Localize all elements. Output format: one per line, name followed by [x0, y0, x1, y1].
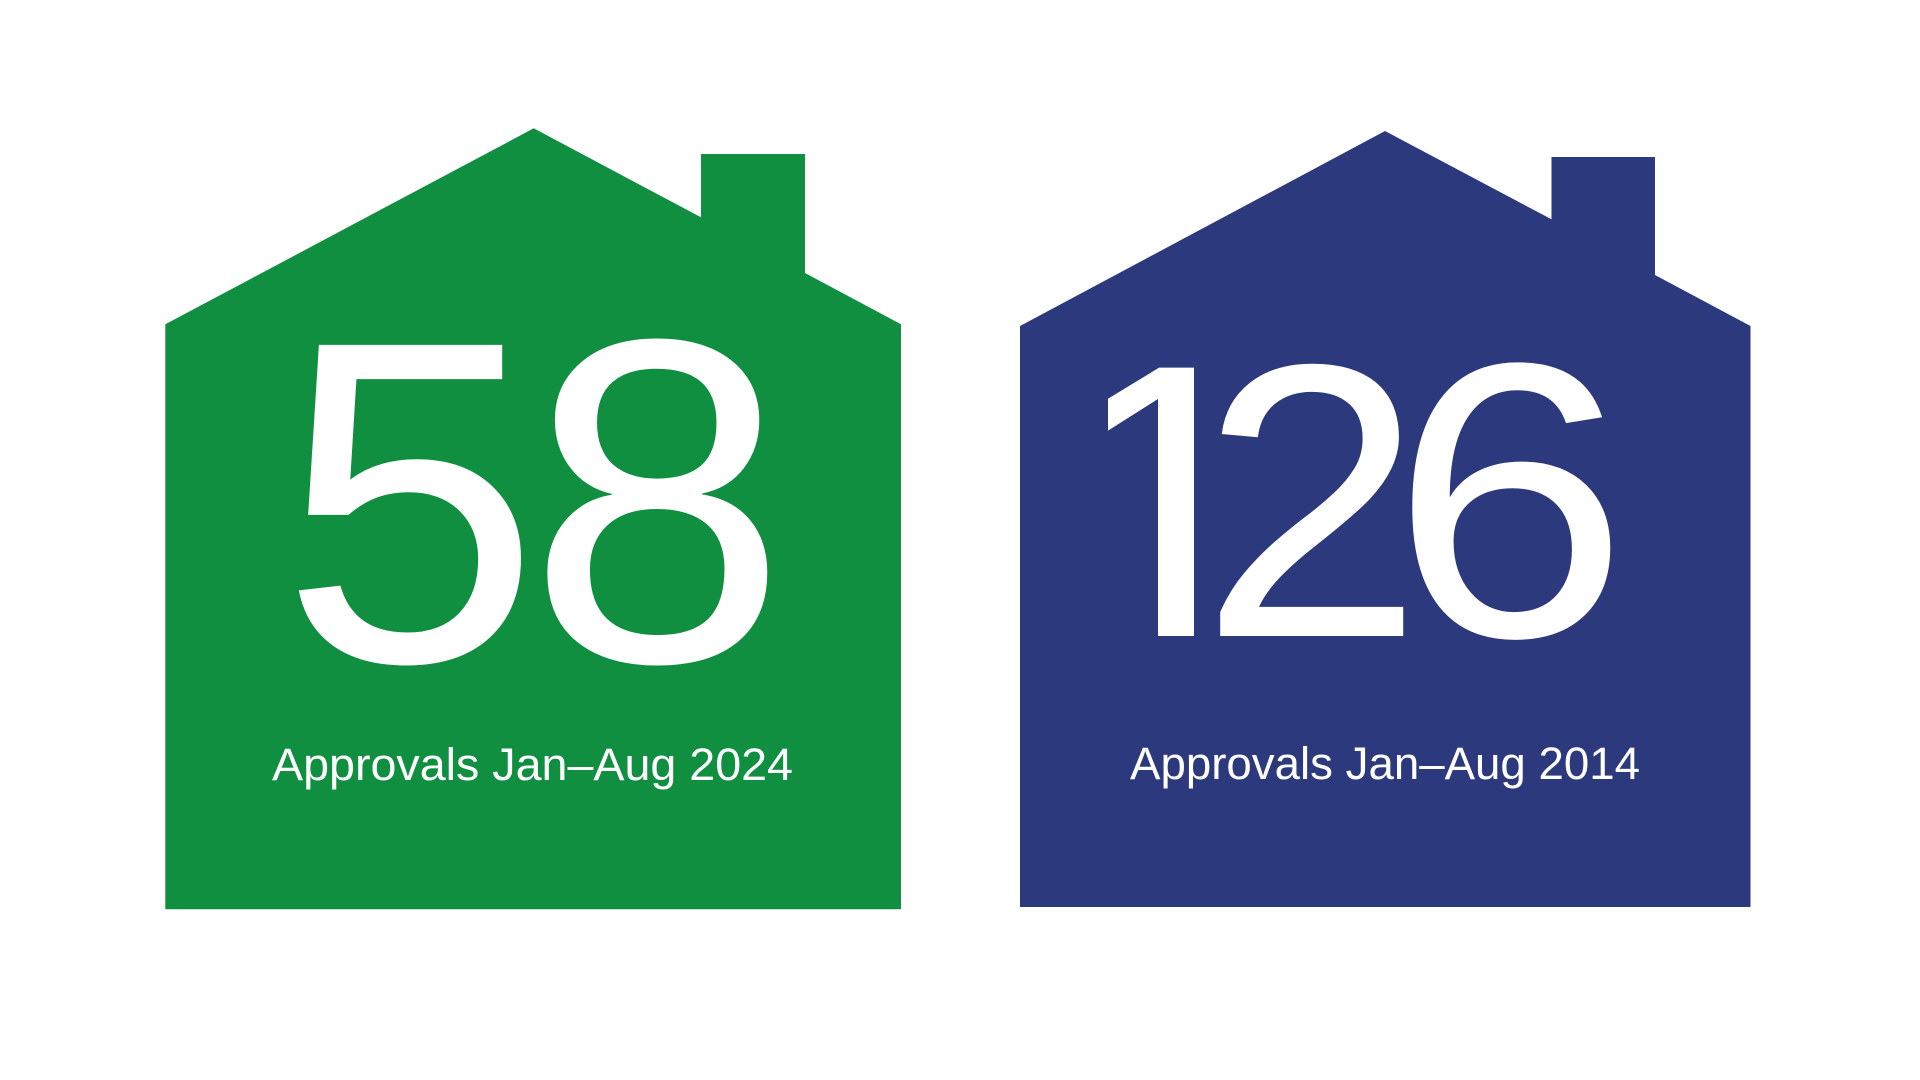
number: 126: 1: [1045, 284, 1290, 719]
panel: green house 2024: [165, 128, 901, 909]
number: 58: [280, 243, 788, 759]
number: 58: 8: [527, 243, 788, 759]
number: 126: 6: [1390, 282, 1629, 720]
panel: blue house 2014: [1020, 131, 1750, 907]
label: approvals 2024: Approvals Jan–Aug 2024: [272, 739, 793, 790]
label: approvals 2014: Approvals Jan–Aug 2014: [1130, 738, 1640, 789]
number: 58: 5: [280, 246, 541, 759]
number: 126: [1108, 362, 1610, 640]
icon: green house shape: [165, 128, 901, 909]
number: 126: 2: [1200, 283, 1423, 719]
icon: blue house shape: [1020, 131, 1750, 907]
